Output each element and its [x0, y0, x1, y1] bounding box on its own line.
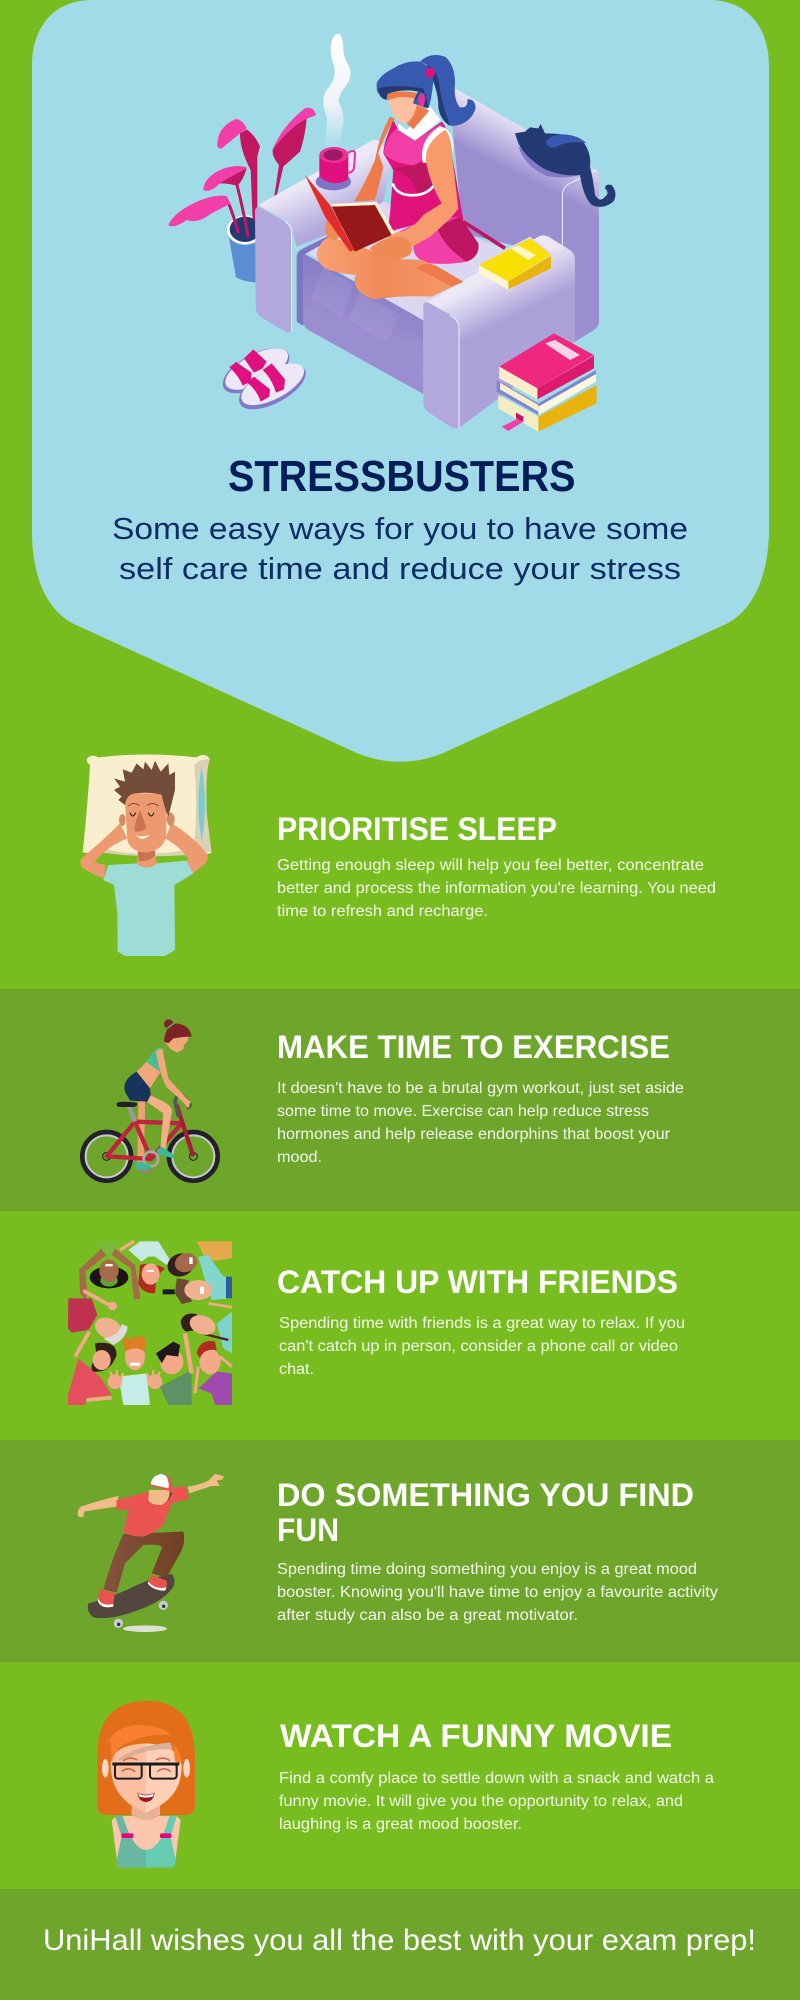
panel: fun [78, 1474, 718, 1632]
panel: sleep [80, 754, 716, 956]
body text: Find a comfy place to settle down with a snack and watch a [279, 1770, 714, 1787]
icon: circle of friends [68, 1241, 232, 1405]
plant [168, 108, 316, 283]
body text: Spending time doing something you enjoy is a great mood [277, 1561, 697, 1578]
heading: WATCH A FUNNY MOVIE [280, 1718, 672, 1754]
body text [277, 857, 716, 920]
body text: laughing is a great mood booster. [279, 1816, 522, 1833]
icon: laughing woman [97, 1701, 195, 1868]
body text: time to refresh and recharge. [277, 903, 488, 920]
band: exercise [0, 989, 800, 1211]
slippers [216, 339, 313, 419]
body text: booster. Knowing you'll have time to enjoy a favourite activity [277, 1584, 718, 1601]
footer message: UniHall wishes you all the best with your exam prep! [43, 1924, 756, 1957]
subtitle: Some easy ways for you to have some [112, 511, 688, 546]
body text: can't catch up in person, consider a phone call or video [279, 1338, 678, 1355]
body text: chat. [279, 1361, 314, 1378]
body text: hormones and help release endorphins that boost your [277, 1126, 670, 1143]
body text: funny movie. It will give you the opportunity to relax, and [279, 1793, 683, 1810]
band: fun [0, 1440, 800, 1662]
subtitle: self care time and reduce your stress [119, 551, 681, 586]
woman [317, 55, 505, 299]
icon: cyclist [82, 1019, 218, 1181]
panel: exercise [82, 1019, 684, 1181]
steam [323, 34, 350, 148]
icon: skateboarder [78, 1474, 224, 1632]
cat [515, 124, 615, 207]
heading [277, 1477, 694, 1548]
heading: PRIORITISE SLEEP [277, 811, 557, 847]
heading: MAKE TIME TO EXERCISE [277, 1029, 670, 1065]
body text: Getting enough sleep will help you feel better, concentrate [277, 857, 704, 874]
stack of books [497, 333, 597, 432]
heading: DO SOMETHING YOU FIND [277, 1477, 694, 1513]
body text [277, 1561, 718, 1624]
body text: better and process the information you're learning. You need [277, 880, 716, 897]
body text: after study can also be a great motivator. [277, 1607, 578, 1624]
icon: sleeping man [80, 754, 212, 956]
title: STRESSBUSTERS [228, 452, 576, 501]
body text: mood. [277, 1149, 322, 1166]
subtitle [112, 511, 688, 586]
mug [316, 147, 355, 190]
panel: movie [97, 1701, 714, 1868]
panel: friends [68, 1241, 685, 1405]
sofa [255, 88, 599, 428]
body text: It doesn't have to be a brutal gym workout, just set aside [277, 1080, 684, 1097]
heading: FUN [277, 1512, 339, 1548]
body text [277, 1080, 684, 1166]
panel: header shield [32, 0, 769, 762]
footer band [0, 1889, 800, 2000]
body text [279, 1770, 714, 1833]
open book [305, 175, 412, 260]
body text [279, 1315, 685, 1378]
heading: CATCH UP WITH FRIENDS [277, 1264, 678, 1300]
illustration: woman reading on sofa [168, 34, 615, 432]
body text: Spending time with friends is a great way to relax. If you [279, 1315, 685, 1332]
yellow book [475, 237, 555, 292]
body text: some time to move. Exercise can help reduce stress [277, 1103, 649, 1120]
